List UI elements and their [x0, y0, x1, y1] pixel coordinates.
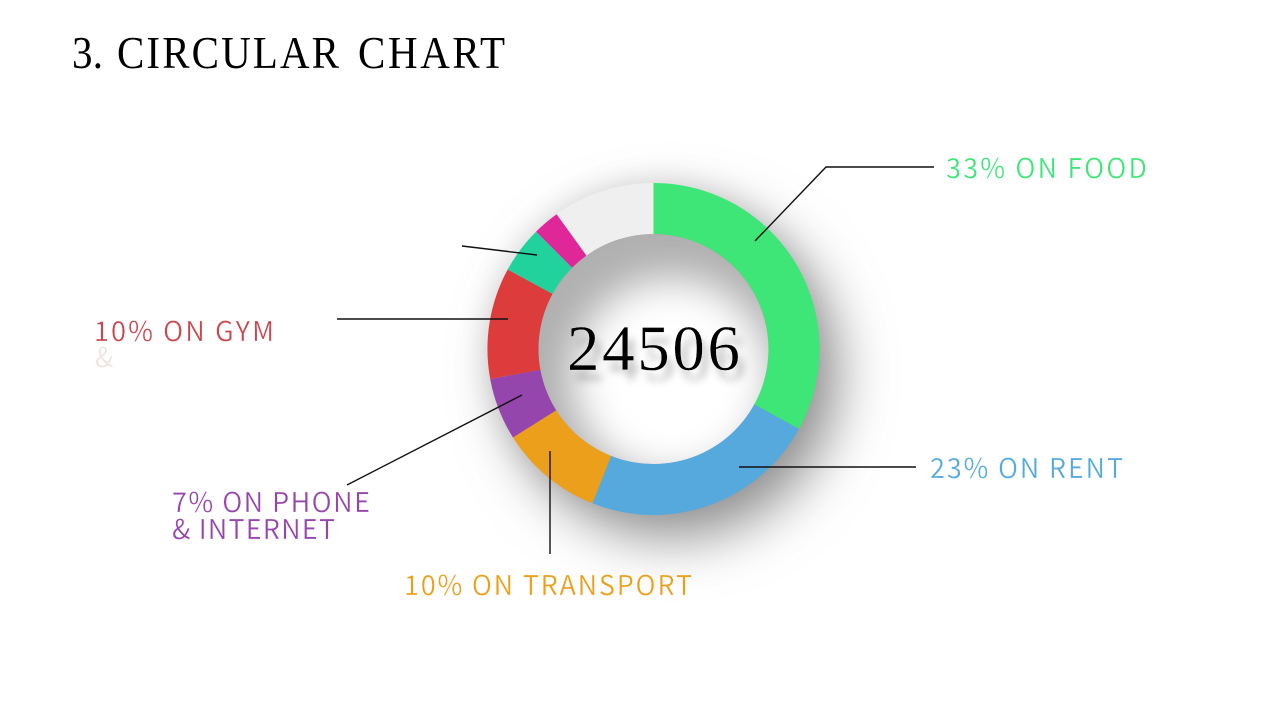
donut drop shadow: [506, 206, 838, 538]
label: rent: 23% ON RENT: [930, 447, 1123, 486]
label: transport: 10% ON TRANSPORT: [404, 564, 692, 603]
label: gym: 10% ON GYM: [94, 310, 274, 349]
segment: phone and internet 7%: [490, 370, 556, 438]
segment: gym 10%: [487, 270, 552, 379]
leader line: transport: [549, 451, 551, 554]
title: [72, 29, 505, 78]
faded ampersand: &: [95, 336, 113, 375]
title: CIRCULAR: [117, 29, 339, 78]
ambient haze: [482, 177, 822, 517]
leader line: teal slice: [462, 246, 537, 255]
centre hole with inner shadow: [538, 234, 772, 478]
centre number: 24506: [567, 313, 740, 385]
segment: food 33%: [654, 183, 820, 429]
segment: remainder: [557, 183, 654, 256]
donut chart: [482, 177, 838, 538]
segment: pink slice: [536, 214, 586, 268]
leader line: phone and internet: [347, 395, 522, 485]
label: phone and internet: 7% ON PHONE: [172, 481, 370, 520]
title: 3.: [72, 29, 103, 78]
label: phone and internet: & INTERNET: [172, 508, 335, 547]
segment: rent 23%: [592, 404, 799, 515]
segment: teal slice: [508, 232, 572, 294]
title: CHART: [358, 29, 505, 78]
centre number shadow: 24506: [574, 326, 745, 394]
leader line: rent: [739, 466, 916, 468]
leader line: gym: [337, 318, 508, 320]
infographic canvas: [74, 38, 1146, 596]
label: phone and internet: [172, 481, 370, 547]
segment: transport 10%: [513, 410, 611, 503]
leader line: food: [755, 167, 934, 241]
label: food: 33% ON FOOD: [946, 147, 1147, 186]
